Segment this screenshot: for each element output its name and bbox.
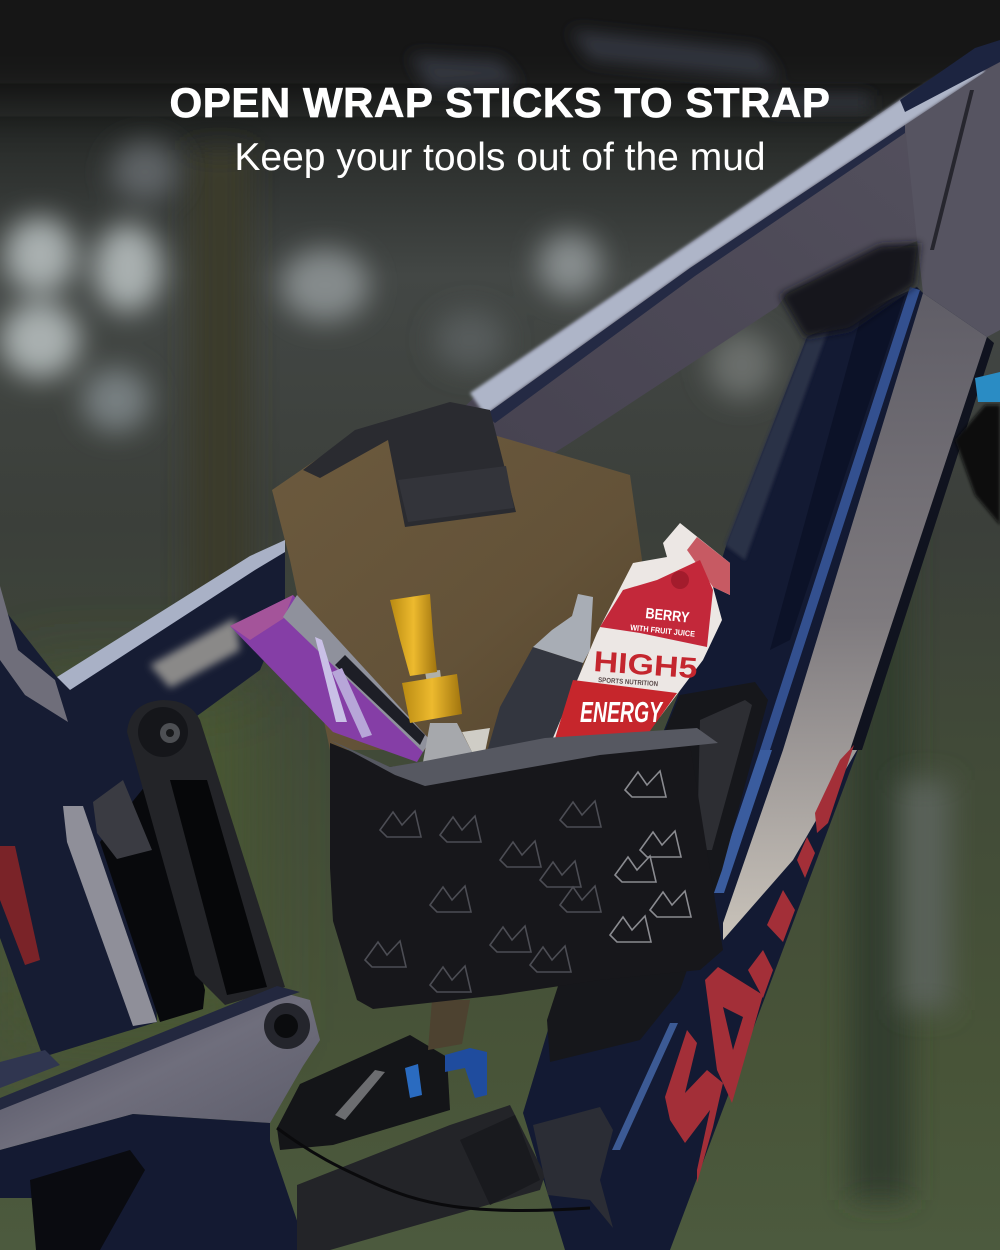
shock, lever and carbon tube	[277, 1035, 613, 1250]
crown pattern on pocket	[365, 801, 601, 992]
tool wrap: tan flap	[272, 402, 642, 750]
tool wrap: hanging strap under pocket	[428, 1000, 470, 1050]
CO2 canister	[487, 594, 593, 752]
energy gel pack: WITH FRUIT JUICE	[630, 623, 696, 639]
title: OPEN WRAP STICKS TO STRAP	[170, 79, 830, 126]
energy gel pack: HIGH5	[593, 646, 698, 685]
junction shadow	[780, 243, 920, 338]
blue highlight strip	[760, 287, 920, 750]
energy gel pack	[550, 523, 730, 745]
down tube	[523, 243, 994, 1250]
CO2 inflator	[390, 594, 490, 762]
blurred handlebars	[410, 30, 870, 110]
energy gel pack: ENERGY	[580, 697, 664, 729]
top tube	[440, 40, 1000, 500]
energy gel pack: BERRY	[645, 605, 690, 627]
tool wrap: black pocket	[330, 728, 723, 1009]
velcro strap	[303, 402, 516, 527]
red frame lettering	[665, 745, 854, 1183]
suspension link arm	[127, 700, 285, 1005]
rear shock and blue lever at right edge	[955, 372, 1000, 525]
grey decal panel	[723, 293, 987, 940]
tool wrap: mounting plate	[547, 682, 768, 1062]
subtitle: Keep your tools out of the mud	[234, 136, 766, 179]
energy gel pack: SPORTS NUTRITION	[598, 677, 658, 688]
energy bar	[230, 595, 430, 762]
heading block	[170, 79, 830, 179]
left frame and rear triangle	[0, 540, 285, 1057]
lower left swingarm	[0, 986, 320, 1250]
